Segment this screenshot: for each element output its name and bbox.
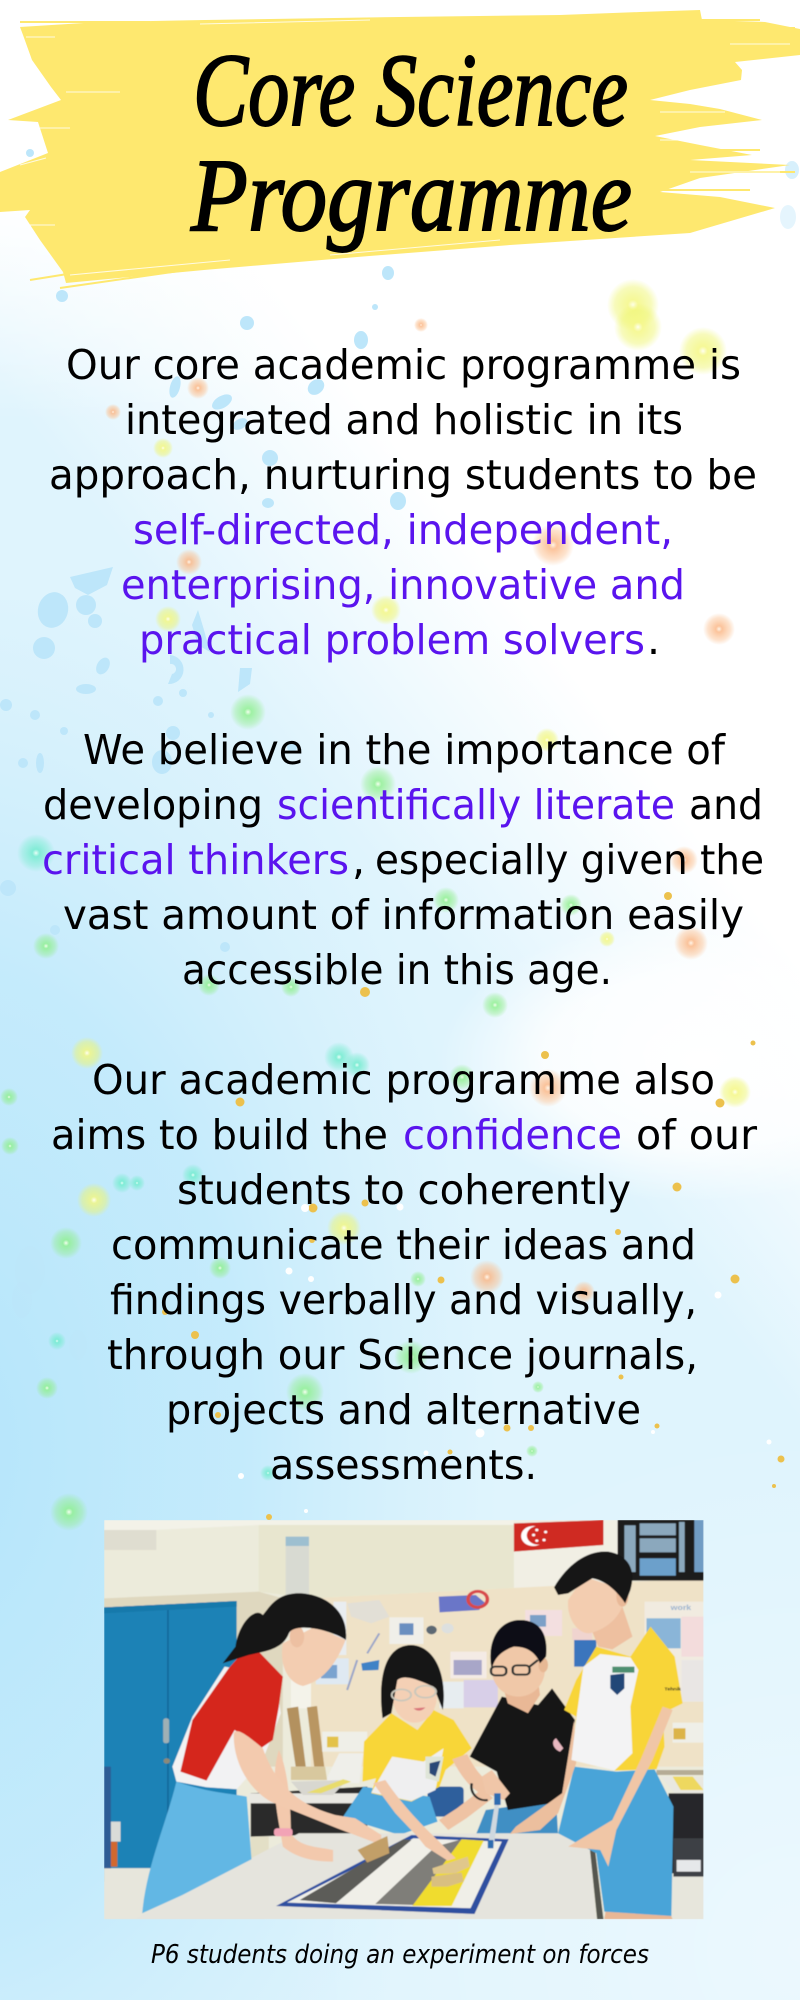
text block: paragraph three — [51, 1056, 757, 1489]
text block: paragraph three: of our — [636, 1111, 757, 1159]
decoration: glowing bokeh lights — [0, 279, 751, 1531]
photo: yellow-shirt girl's hand — [373, 1780, 456, 1861]
photo: boy in yellow shirt: Tehnik — [665, 1687, 681, 1692]
title banner: yellow brush stroke — [0, 10, 800, 288]
text block: paragraph two: developing — [43, 781, 263, 829]
text block: paragraph three: students to coherently — [177, 1166, 631, 1214]
text block: paragraph one: practical problem solvers — [139, 616, 645, 664]
text block: paragraph three: confidence — [403, 1111, 622, 1159]
text block: paragraph two: and — [689, 781, 763, 829]
photo: table — [234, 1832, 604, 1920]
text block: paragraph two: especially given the — [375, 836, 764, 884]
text block: paragraph two: vast amount of information easily — [63, 891, 744, 939]
photo: classroom wall and ceiling — [104, 1520, 704, 1919]
text block: paragraph three: communicate their ideas and — [111, 1221, 696, 1269]
photo caption: P6 students doing an experiment on forces — [151, 1940, 649, 1970]
photo: floor — [104, 1836, 269, 1882]
text block: paragraph two: We believe in the importance of — [83, 726, 727, 774]
text block: paragraph one: approach, nurturing students to be — [49, 451, 757, 499]
photo: posters on wall: work — [670, 1604, 692, 1612]
text block: paragraph one — [49, 341, 757, 664]
photo: boy in yellow shirt — [510, 1552, 683, 1919]
photo: window — [618, 1520, 704, 1581]
text block: paragraph one: . — [647, 616, 660, 664]
text block: paragraph three: through our Science journals, — [107, 1331, 698, 1379]
photo: black-shirt boy — [470, 1620, 575, 1835]
text block: paragraph three: aims to build the — [51, 1111, 388, 1159]
text block: paragraph three: projects and alternative — [166, 1386, 641, 1434]
text block: paragraph two — [42, 726, 764, 994]
text block: paragraph three: assessments. — [270, 1441, 537, 1489]
text block: paragraph two: , — [352, 836, 365, 884]
text block: paragraph one: Our core academic programme is — [66, 341, 741, 389]
photo: students doing a forces experiment — [104, 1520, 704, 1919]
photo: blue door — [104, 1601, 237, 1882]
text block: paragraph two: critical thinkers — [42, 836, 349, 884]
text block: paragraph three: findings verbally and visually, — [110, 1276, 697, 1324]
photo: wall fittings and back bench — [249, 1706, 704, 1877]
decoration: blue paint splashes — [0, 149, 799, 1360]
photo: girl in red shirt — [142, 1593, 381, 1913]
title: Core Science Programme: Programme — [190, 138, 632, 253]
text block: paragraph two: accessible in this age. — [182, 946, 612, 994]
text block: paragraph one: self-directed, independent, — [133, 506, 673, 554]
text block: paragraph two: scientifically literate — [277, 781, 675, 829]
photo: posters on wall — [316, 1591, 704, 1708]
text block: paragraph three: Our academic programme also — [92, 1056, 715, 1104]
title: Core Science Programme: Core Science — [193, 33, 628, 148]
text block: paragraph one: integrated and holistic in its — [125, 396, 683, 444]
title: Core Science Programme — [190, 33, 632, 253]
photo: girl in yellow shirt — [343, 1645, 510, 1835]
photo: Singapore flag — [514, 1520, 604, 1552]
photo: friction board apparatus — [276, 1793, 509, 1914]
text block: paragraph one: enterprising, innovative and — [121, 561, 685, 609]
decoration: gold and white dots — [162, 892, 784, 1520]
